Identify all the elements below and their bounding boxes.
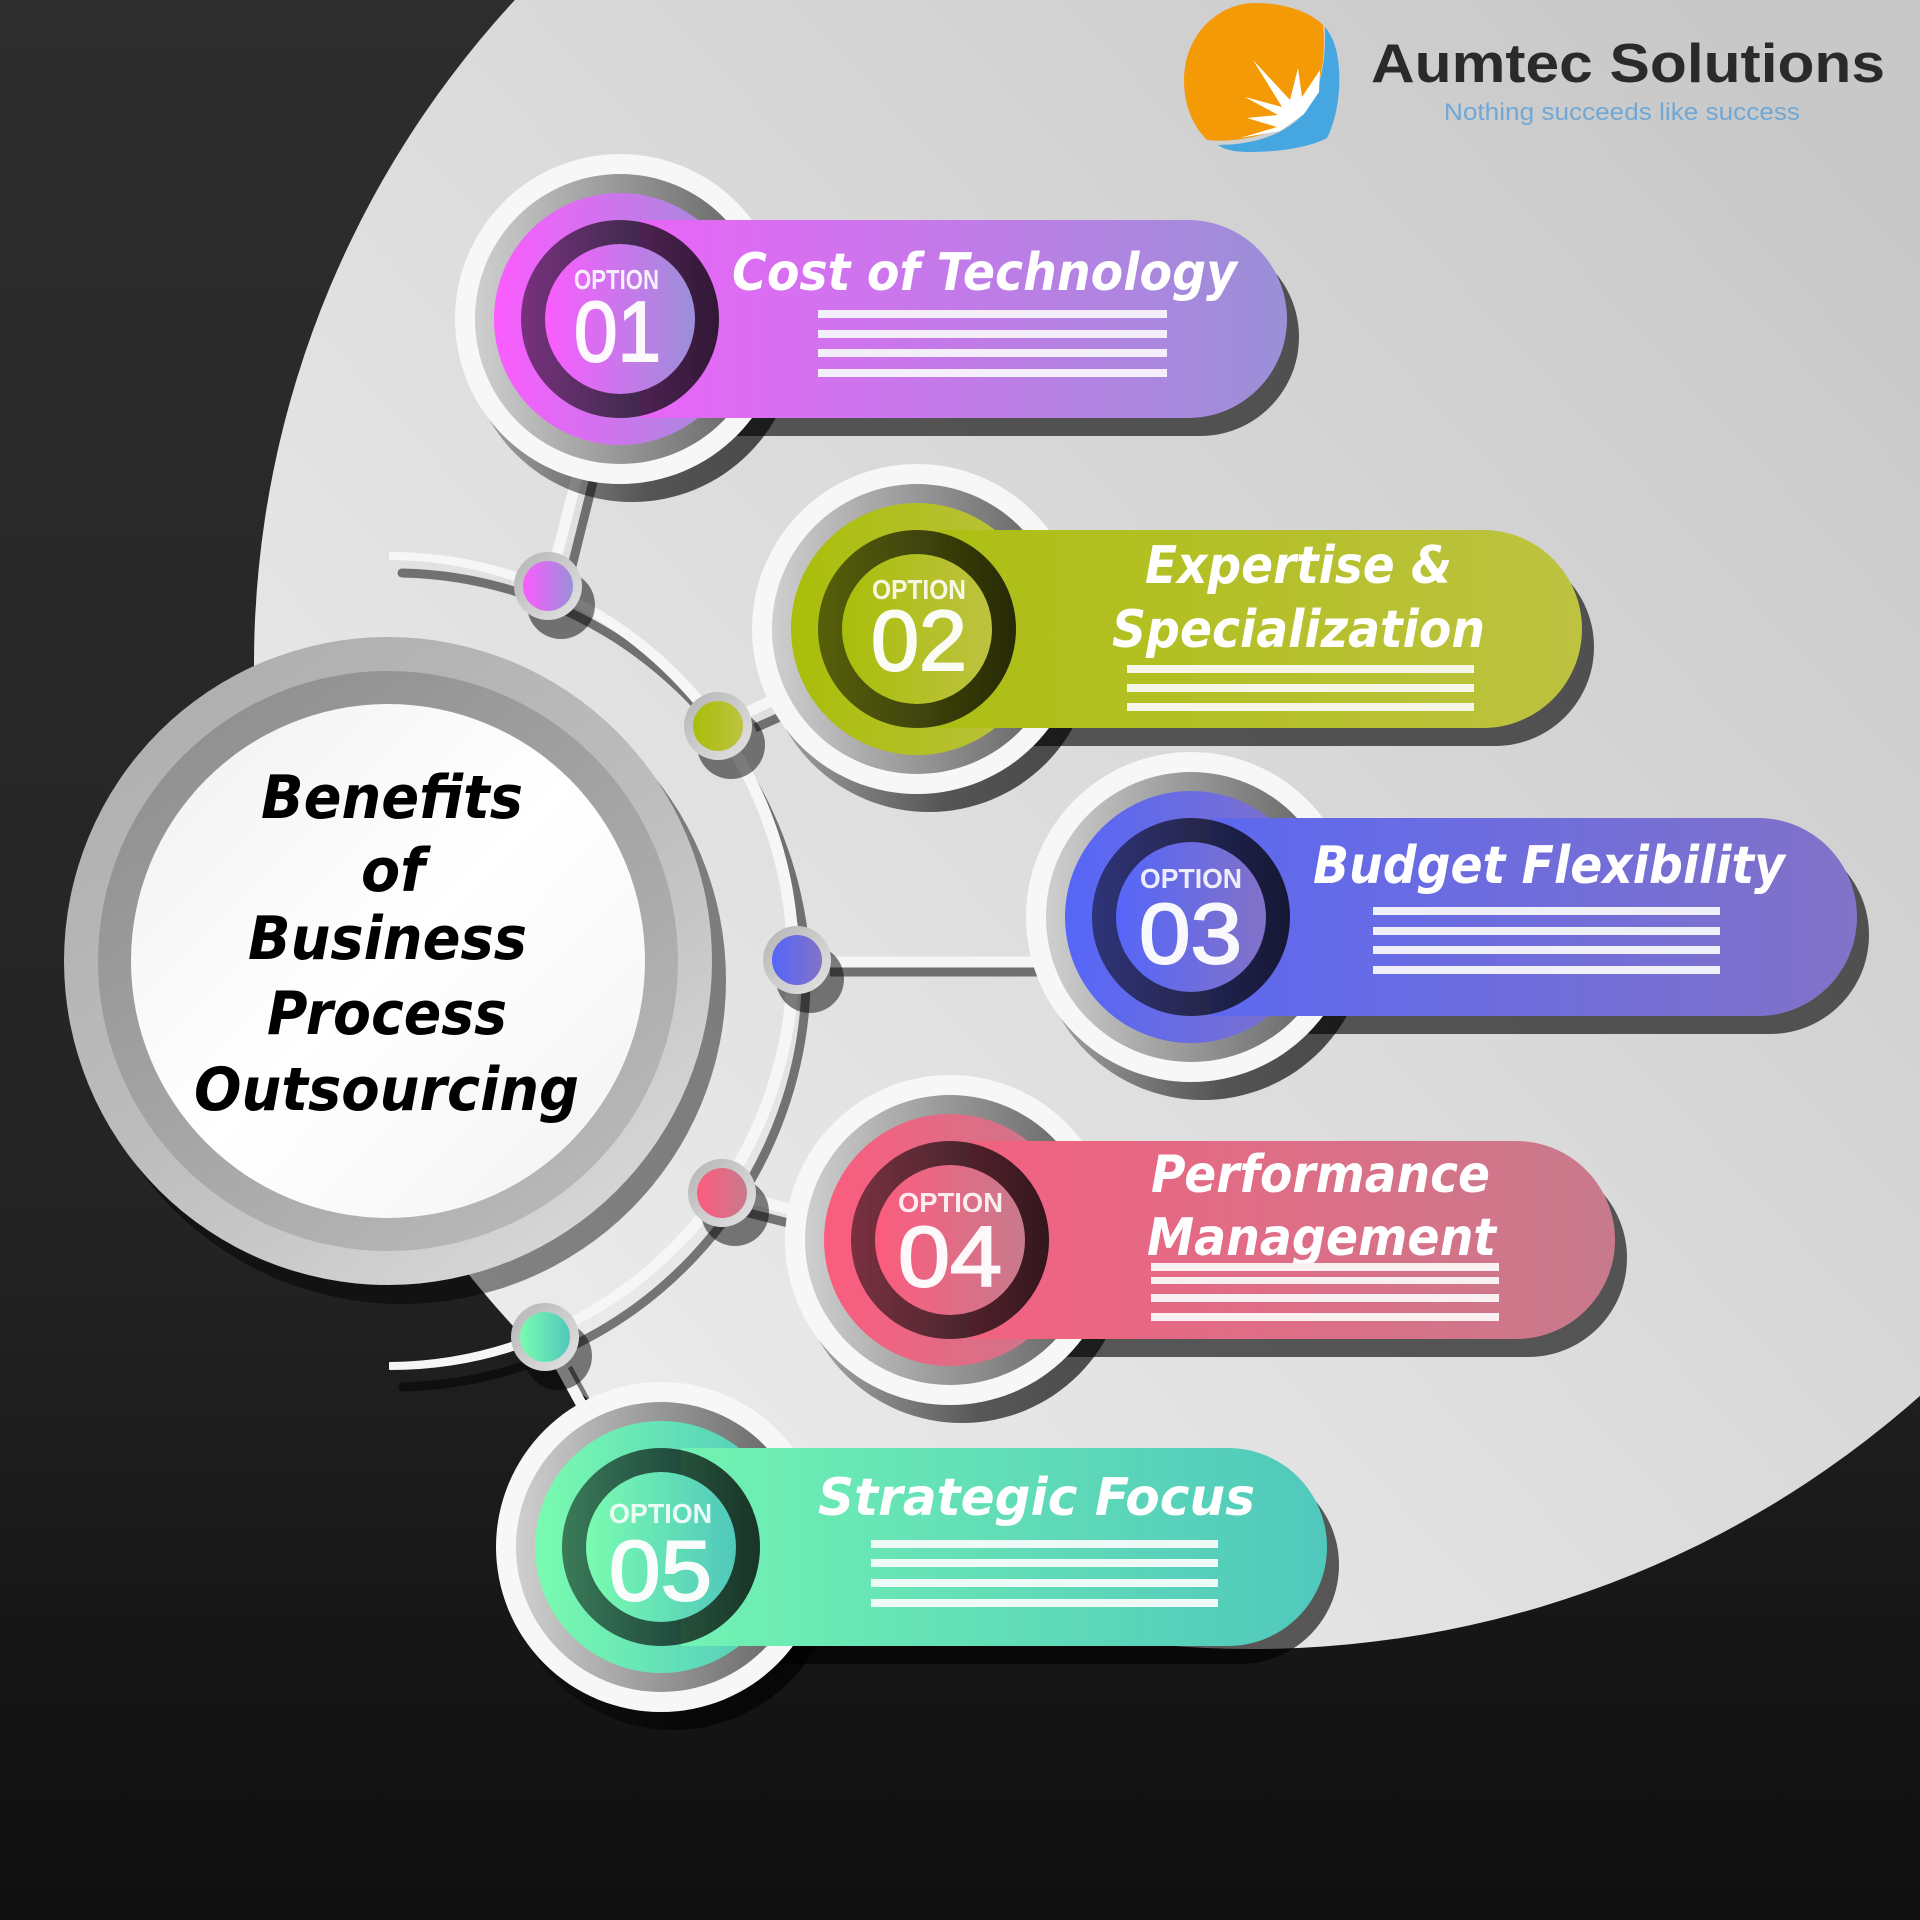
panel: option 04 Performance Management	[785, 1075, 1627, 1423]
central title: Outsourcing	[194, 1055, 579, 1125]
panel: option 05 Strategic Focus: Strategic Focus	[818, 1468, 1255, 1528]
panel: option 02 Expertise & Specialization: Expertise &	[1145, 536, 1452, 596]
panel: option 05 Strategic Focus: OPTION	[609, 1498, 712, 1529]
panel: option 02 Expertise & Specialization: 02	[871, 594, 967, 689]
node 1	[514, 552, 595, 639]
central title: Process	[267, 979, 507, 1049]
central title: Business	[248, 904, 527, 974]
panel: option 03 Budget Flexibility: 03	[1139, 887, 1242, 982]
panel: option 01 Cost of Technology: 01	[574, 285, 661, 380]
connector lines	[544, 470, 1045, 1420]
node 5	[511, 1303, 592, 1390]
panel: option 04 Performance Management: OPTION	[898, 1187, 1003, 1218]
node 3	[763, 926, 844, 1013]
panel: option 03 Budget Flexibility: Budget Flexibility	[1313, 836, 1787, 896]
panel: option 01 Cost of Technology: Cost of Technology	[732, 243, 1239, 303]
node 4	[688, 1159, 769, 1246]
panel: option 01 Cost of Technology	[455, 154, 1299, 502]
panel: option 01 Cost of Technology: OPTION	[574, 264, 659, 295]
panel: option 05 Strategic Focus: 05	[609, 1524, 712, 1619]
central circle	[64, 637, 726, 1304]
panel: option 02 Expertise & Specialization: Specialization	[1112, 600, 1485, 660]
logo tagline: Nothing succeeds like success	[1444, 99, 1800, 126]
panel: option 04 Performance Management: Performance	[1151, 1145, 1490, 1205]
logo icon	[1184, 3, 1339, 152]
panel: option 02 Expertise & Specialization	[752, 464, 1594, 812]
central title: Benefits	[261, 763, 523, 833]
panel: option 03 Budget Flexibility	[1026, 752, 1869, 1100]
logo wordmark: Aumtec Solutions	[1371, 32, 1885, 94]
central title: of	[361, 836, 432, 906]
panel: option 05 Strategic Focus	[496, 1382, 1339, 1730]
panel: option 04 Performance Management: Management	[1147, 1208, 1498, 1268]
panel: option 04 Performance Management: 04	[898, 1210, 1002, 1305]
panel: option 02 Expertise & Specialization: OPTION	[872, 574, 966, 605]
large light background circle	[254, 0, 1920, 1649]
node 2	[684, 692, 765, 779]
connecting arc	[390, 553, 806, 1387]
central title	[194, 763, 579, 1125]
panel: option 03 Budget Flexibility: OPTION	[1140, 863, 1242, 894]
